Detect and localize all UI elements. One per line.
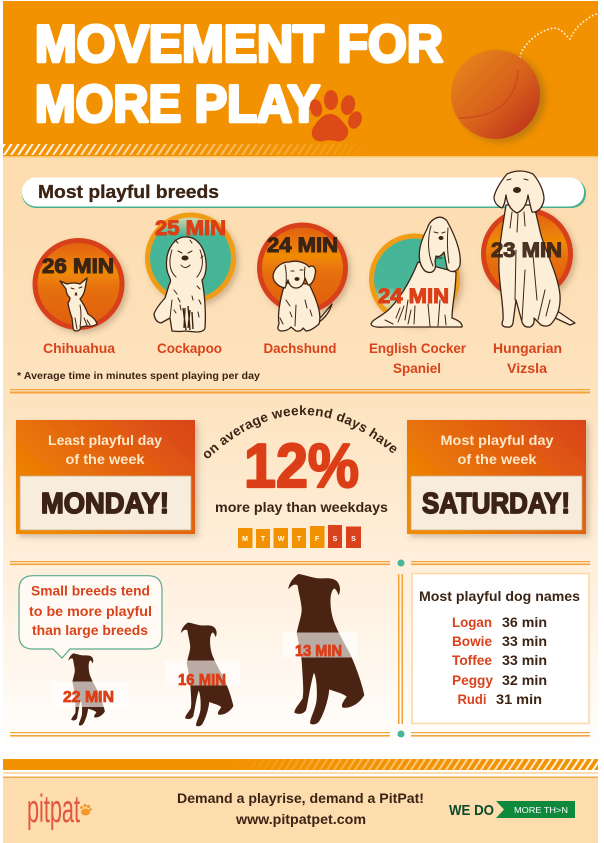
panel heading: [48, 432, 162, 467]
breed: cockapoo: [145, 212, 236, 332]
disc: [481, 208, 573, 300]
logo: more than: MORE TH>N: [514, 806, 568, 815]
week day blocks: S: [351, 536, 356, 543]
medium dog: [165, 622, 240, 726]
footer stripe bar: [3, 759, 598, 778]
name list: 36 min: [502, 614, 547, 630]
minutes label: 23 MIN: [491, 239, 562, 262]
panel heading: [440, 432, 554, 467]
panel: least playful day: [16, 420, 195, 534]
speech bubble: [19, 576, 162, 658]
diagonal stripes: [3, 144, 373, 155]
breed names: Cockapoo: [157, 341, 222, 356]
name list: 33 min: [502, 652, 547, 668]
panel heading: Most playful day: [440, 432, 554, 448]
logo: pitpat: [27, 788, 92, 831]
disc: [32, 238, 124, 330]
breed names: Spaniel: [393, 361, 441, 376]
section heading: most playful breeds: Most playful breeds: [38, 182, 219, 202]
week day blocks: T: [297, 536, 302, 543]
name list: [452, 614, 547, 707]
minutes label: 24 MIN: [378, 285, 449, 308]
breed: chihuahua: [32, 238, 124, 331]
medium dog: 16 MIN: [178, 672, 226, 689]
callout: 12 percent more play: [204, 405, 396, 548]
breed names: English Cocker: [369, 341, 467, 356]
breed: dachshund: [257, 222, 348, 331]
footer: [3, 778, 598, 843]
week day blocks: M: [242, 536, 248, 543]
name list: Bowie: [452, 633, 492, 649]
name list: 32 min: [502, 672, 547, 688]
speech bubble: to be more playful: [29, 604, 152, 619]
header banner: [3, 1, 600, 158]
name list: Peggy: [452, 672, 493, 688]
panel heading: Least playful day: [48, 432, 162, 448]
call to action: [177, 790, 424, 827]
dog illustration: [371, 217, 462, 327]
value: monday: MONDAY!: [41, 488, 169, 520]
large dog: 13 MIN: [295, 643, 342, 660]
minutes label: 24 MIN: [267, 234, 338, 257]
breed names: Vizsla: [507, 361, 548, 376]
disc: [145, 212, 236, 304]
speech bubble: than large breeds: [32, 623, 148, 638]
breed names: Chihuahua: [43, 341, 116, 356]
dog illustration: [273, 261, 332, 331]
dog illustration: [154, 237, 206, 332]
icon: paw print: [308, 90, 364, 141]
title: MORE PLAY: [35, 76, 320, 134]
breed: hungarian vizsla: [481, 171, 575, 327]
name list: 33 min: [502, 633, 547, 649]
large dog: [283, 574, 364, 724]
title: MOVEMENT FOR: [35, 16, 443, 74]
value: saturday: SATURDAY!: [422, 488, 570, 520]
icon: bounce trail: [520, 13, 600, 57]
icon: small paw: [80, 804, 92, 816]
week day blocks: T: [261, 536, 266, 543]
week day blocks: W: [278, 536, 285, 543]
breed names: Dachshund: [264, 341, 336, 356]
panel: most playful day: [407, 420, 586, 534]
body background: [3, 157, 598, 759]
big number: 12%: [244, 432, 359, 501]
name list: Logan: [452, 614, 492, 630]
panel heading: Most playful dog names: [419, 589, 580, 604]
week day blocks: S: [333, 536, 338, 543]
caption: more play than weekdays: [215, 499, 388, 515]
breed: english cocker spaniel: [369, 217, 462, 327]
footnote: * Average time in minutes spent playing per day: [17, 370, 260, 382]
speech bubble: Small breeds tend: [31, 584, 150, 598]
call to action: www.pitpatpet.com: [235, 811, 366, 827]
call to action: Demand a playrise, demand a PitPat!: [177, 790, 424, 806]
minutes label: 25 MIN: [155, 217, 226, 240]
minutes label: 26 MIN: [42, 255, 114, 278]
panel: most playful dog names: [412, 574, 589, 724]
breed names: [43, 341, 562, 376]
dog illustration: [494, 171, 575, 327]
panel heading: of the week: [66, 451, 145, 467]
week day blocks: F: [315, 536, 320, 543]
small dog: [52, 653, 127, 726]
icon: ball: [451, 50, 540, 139]
disc: [369, 234, 460, 324]
week day blocks: [238, 525, 361, 548]
disc: [257, 222, 348, 314]
small dog: 22 MIN: [63, 689, 114, 706]
dog illustration: [60, 278, 97, 331]
section heading: most playful breeds: [22, 178, 586, 208]
name list: 31 min: [496, 691, 542, 707]
chart: play minutes by dog size: [52, 574, 364, 726]
name list: Toffee: [452, 652, 492, 668]
curved caption: on average weekend days have: [204, 405, 396, 458]
panel heading: of the week: [458, 451, 537, 467]
name list: Rudi: [458, 691, 486, 707]
logo: more than: WE DO: [449, 802, 494, 819]
logo: more than: [449, 801, 575, 819]
logo: pitpat: pitpat: [27, 788, 80, 831]
title: [35, 16, 443, 134]
breed names: Hungarian: [493, 341, 562, 356]
